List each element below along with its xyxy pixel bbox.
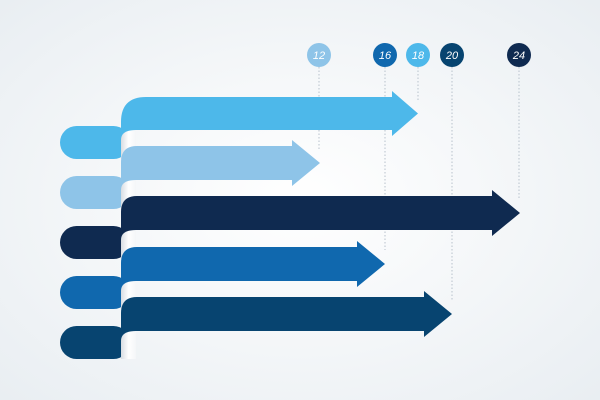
value markers bbox=[307, 43, 531, 67]
value markers: 18 bbox=[412, 50, 425, 62]
value markers: 16 bbox=[379, 50, 392, 62]
dotted guide lines bbox=[319, 67, 519, 300]
row 5 arrow bbox=[60, 291, 452, 359]
value markers: 12 bbox=[313, 50, 325, 62]
value markers: 20 bbox=[445, 50, 459, 62]
row 3 arrow bbox=[60, 190, 520, 259]
row 4 arrow bbox=[60, 241, 385, 309]
row 1 arrow bbox=[60, 91, 418, 159]
value markers: 24 bbox=[512, 50, 525, 62]
row 2 arrow bbox=[60, 140, 320, 209]
